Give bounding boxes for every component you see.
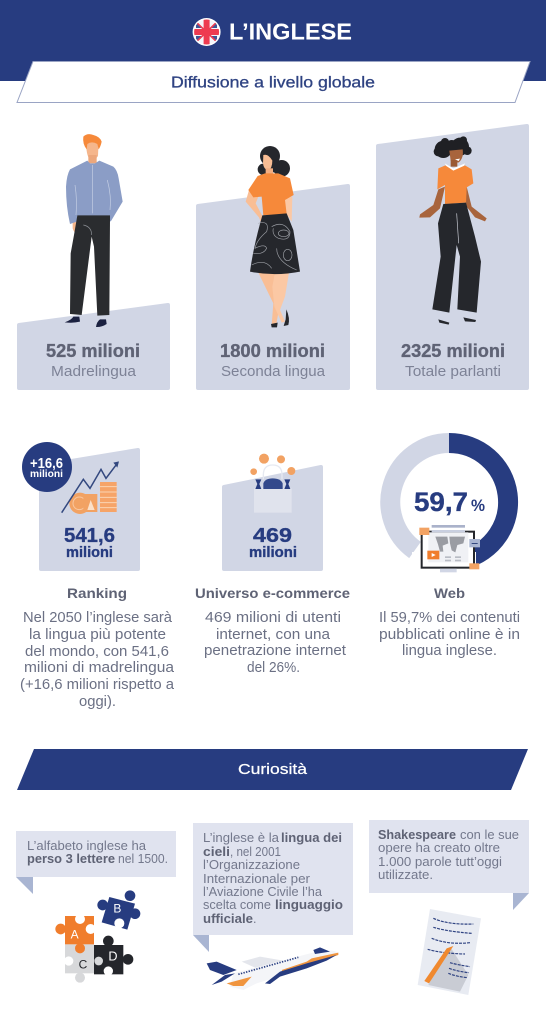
text block: web: Il 59,7% dei contenuti [379, 610, 520, 626]
text block: ranking: la lingua più potente [29, 627, 166, 643]
callout: lingua dei cieli: , nel 2001 [230, 845, 281, 859]
callout: lingua dei cieli: ufficiale [203, 912, 253, 926]
value: 525 milioni [46, 340, 140, 361]
badge: +16,6 milioni: +16,6 [30, 456, 63, 472]
text block: ranking: Ranking [67, 585, 127, 601]
piece B: B [113, 901, 121, 915]
value: 469 [253, 524, 292, 547]
panel: totale parlanti [378, 126, 527, 388]
value: 2325 milioni [401, 340, 505, 361]
label: Seconda lingua [221, 363, 326, 380]
callout: lingua dei cieli: l’Aviazione Civile l’ha [203, 885, 322, 899]
icon: monitor with world map [419, 525, 480, 572]
header band [0, 0, 546, 81]
badge: +16,6 milioni: milioni [30, 469, 63, 480]
callout: shakespeare: 1.000 parole tutt’oggi [378, 855, 502, 869]
figure: man [65, 134, 123, 327]
badge: +16,6 milioni [22, 442, 72, 492]
text block: web: Web [434, 585, 465, 601]
text block: e-commerce: 469 milioni di utenti [205, 610, 341, 626]
callout: alfabeto: perso 3 lettere [27, 852, 115, 866]
callout: shakespeare [369, 820, 529, 910]
stat: e-commerce [224, 454, 321, 569]
value: 541,6 [64, 524, 115, 547]
icon: growth chart and coins [62, 461, 119, 514]
callout: lingua dei cieli: l’Organizzazione [203, 858, 300, 872]
callout: alfabeto: L’alfabeto inglese ha [27, 839, 146, 853]
icon: airplane [207, 947, 338, 990]
label: Totale parlanti [405, 363, 501, 380]
panel: seconda lingua [198, 146, 348, 388]
text block: web [379, 585, 520, 659]
text block: web: lingua inglese. [402, 643, 497, 659]
callout: lingua dei cieli: lingua dei [281, 831, 342, 845]
figure: woman in skirt [246, 146, 300, 327]
text block: e-commerce: penetrazione internet [204, 643, 346, 659]
value: 59,7 [414, 487, 468, 517]
text block: ranking: oggi). [79, 694, 116, 710]
title: L’INGLESE [229, 18, 352, 44]
callout: lingua dei cieli [193, 823, 353, 952]
subtitle ribbon: Diffusione a livello globale [171, 74, 375, 92]
callout: shakespeare: Shakespeare [378, 828, 456, 842]
icon: puzzle pieces [55, 890, 140, 983]
icon: UK flag [192, 18, 221, 46]
label: Madrelingua [51, 363, 137, 380]
callout: shakespeare: con le sue [460, 828, 519, 842]
callout: shakespeare: opere ha creato oltre [378, 841, 500, 855]
text block: ranking: Nel 2050 l’inglese sarà [23, 610, 173, 626]
text block: ranking [20, 585, 175, 710]
text block: ranking: del mondo, con 541,6 [25, 644, 169, 660]
icon: shopping bag [250, 454, 295, 513]
stat: ranking [22, 442, 138, 569]
text block: e-commerce: del 26%. [247, 660, 300, 676]
subtitle ribbon [17, 62, 530, 102]
text block: e-commerce: internet, con una [216, 627, 331, 643]
text block: ranking: milioni di madrelingua [24, 660, 175, 676]
callout: lingua dei cieli: scelta come [203, 898, 271, 912]
unit: milioni [66, 545, 113, 561]
figure: woman with curly hair [419, 136, 487, 325]
callout: lingua dei cieli: Internazionale per [203, 872, 310, 886]
piece D: D [108, 949, 117, 963]
banner: curiosità: Curiosità [238, 761, 308, 778]
piece C: C [79, 957, 88, 971]
donut chart: web 59,7% [390, 443, 508, 576]
icon: manuscript and quill [418, 909, 481, 995]
callout: lingua dei cieli: . [253, 912, 256, 926]
panel: madrelingua [19, 134, 168, 388]
piece A: A [71, 927, 79, 941]
value: 1800 milioni [220, 340, 325, 361]
callout: lingua dei cieli: cieli [203, 845, 230, 859]
callout: alfabeto: nel 1500. [118, 852, 168, 866]
banner: curiosità [17, 749, 528, 790]
text block: e-commerce [195, 585, 350, 676]
text block: web: pubblicati online è in [379, 627, 520, 643]
callout: alfabeto [16, 831, 176, 894]
text block: ranking: (+16,6 milioni rispetto a [20, 677, 175, 693]
callout: lingua dei cieli: L’inglese è la [203, 831, 279, 845]
callout: shakespeare: utilizzate. [378, 868, 433, 882]
callout: lingua dei cieli: linguaggio [275, 898, 343, 912]
unit: milioni [249, 545, 297, 561]
text block: e-commerce: Universo e-commerce [195, 585, 350, 601]
percent sign: % [471, 496, 485, 515]
